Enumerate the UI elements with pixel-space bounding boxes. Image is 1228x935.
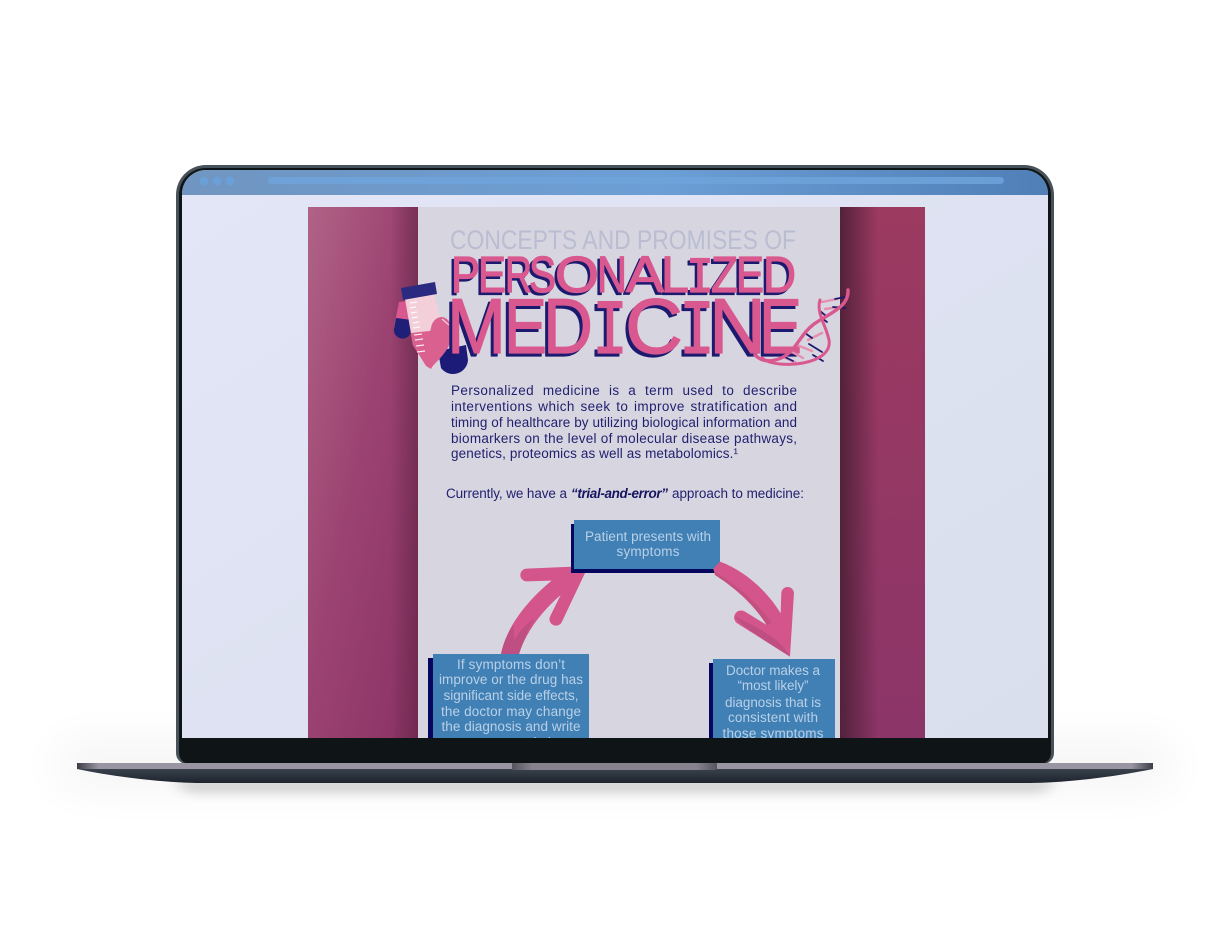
flow box: patient presents with symptoms: Patient presents with (585, 529, 711, 544)
icon: pills, test tube and heart (394, 282, 468, 374)
personalized pink layer: D (763, 246, 796, 303)
personalized shadow layer (452, 258, 789, 296)
personalized pink layer: N (597, 246, 627, 303)
flow box: doctor makes a most likely diagnosis (709, 659, 835, 738)
personalized shadow layer: I (684, 254, 712, 310)
flow box: patient presents with symptoms: symptoms (616, 544, 680, 559)
medicine shadow layer: I (676, 292, 712, 380)
personalized shadow layer: A (624, 248, 662, 306)
icon: heart (430, 317, 450, 367)
browser screen (182, 170, 1048, 750)
flow box: if symptoms don't improve: the diagnosis and write (442, 719, 580, 734)
intro paragraph (451, 383, 797, 461)
medicine shadow layer: E (756, 285, 799, 373)
medicine shadow layer (449, 302, 797, 358)
medicine shadow layer: N (706, 285, 763, 373)
personalized shadow layer: P (448, 248, 478, 306)
base body (77, 763, 1153, 783)
flow box: doctor makes a most likely diagnosis: Doctor makes a (726, 663, 820, 678)
laptop mockup scene (77, 165, 1153, 798)
intro paragraph: interventions which seek to improve stratification and (451, 399, 797, 414)
personalized shadow layer: R (502, 248, 530, 306)
medicine shadow layer: D (540, 285, 590, 373)
laptop lid bezel (176, 165, 1054, 764)
personalized shadow layer: E (476, 248, 504, 306)
medicine pink layer: C (625, 282, 683, 370)
medicine pink layer: E (759, 282, 802, 370)
trial-and-error statement: Currently, we have a (446, 486, 567, 501)
personalized pink layer (454, 256, 794, 294)
medicine shadow layer: E (501, 285, 544, 373)
central infographic column (418, 207, 840, 738)
title: concepts and promises of: CONCEPTS AND PROMISES OF (450, 225, 796, 255)
personalized shadow layer: L (658, 248, 686, 306)
arrow: box to patient (501, 566, 588, 654)
left maroon panel (308, 207, 418, 738)
personalized shadow layer: D (760, 248, 794, 306)
flow box: if symptoms don't improve: significant side effects, (444, 688, 578, 703)
medicine shadow layer: I (589, 292, 625, 380)
base notch (512, 763, 717, 770)
flow box: doctor makes a most likely diagnosis: diagnosis that is (725, 695, 821, 710)
personalized pink layer: E (478, 246, 506, 303)
intro paragraph: biomarkers on the level of molecular disease pathways, (451, 431, 797, 446)
personalized shadow layer: S (526, 248, 554, 306)
trial-and-error statement: approach to medicine: (672, 486, 804, 501)
flow box: if symptoms don't improve (428, 654, 589, 738)
medicine pink layer: M (447, 282, 506, 370)
medicine pink layer: N (709, 282, 766, 370)
personalized pink layer: R (505, 246, 532, 303)
screen background (182, 170, 1048, 738)
personalized shadow layer: Z (708, 248, 736, 306)
flow box: if symptoms don't improve: improve or the drug has (439, 672, 583, 687)
personalized shadow layer: N (594, 248, 624, 306)
medicine pink layer: I (679, 289, 715, 377)
medicine pink layer: D (543, 282, 593, 370)
intro paragraph: genetics, proteomics as well as metabolomics.¹ (451, 446, 738, 461)
flow box: doctor makes a most likely diagnosis: consistent with (728, 710, 818, 725)
personalized pink layer: A (626, 246, 664, 303)
title: personalized (452, 256, 794, 296)
flow box: patient presents with symptoms (571, 520, 720, 573)
medicine shadow layer: M (444, 285, 503, 373)
laptop base (77, 763, 1153, 783)
icon: test tube (401, 282, 440, 369)
personalized shadow layer: E (734, 248, 762, 306)
personalized pink layer: P (451, 246, 480, 303)
intro paragraph: timing of healthcare by utilizing biological information and (451, 415, 797, 430)
icon: right capsule (438, 345, 468, 374)
medicine pink layer (452, 298, 800, 355)
base top highlight strip (77, 763, 1153, 769)
medicine pink layer: E (504, 282, 547, 370)
icon: dna helix (755, 290, 848, 364)
flow box: if symptoms don't improve: If symptoms don’t (457, 657, 565, 672)
personalized shadow layer: O (552, 248, 596, 306)
trial-and-error statement: “trial-and-error” (571, 486, 668, 501)
icon: left capsule (394, 301, 411, 338)
right maroon panel (840, 207, 925, 738)
arrow: patient to doctor (713, 562, 794, 657)
personalized pink layer: L (661, 246, 689, 303)
medicine shadow layer: C (622, 285, 680, 373)
personalized pink layer: E (736, 246, 764, 303)
personalized pink layer: S (529, 246, 556, 303)
intro paragraph: Personalized medicine is a term used to describe (451, 383, 797, 398)
personalized pink layer: Z (711, 246, 738, 303)
title: medicine (449, 298, 800, 358)
personalized pink layer: I (686, 251, 714, 308)
trial-and-error statement (446, 488, 803, 501)
flow box: if symptoms don't improve: the doctor may change (441, 704, 581, 719)
personalized pink layer: O (555, 246, 599, 303)
flow box: doctor makes a most likely diagnosis: those symptoms (722, 726, 824, 741)
browser title bar (182, 170, 1048, 195)
laptop shadow (60, 745, 1170, 791)
flow box: doctor makes a most likely diagnosis: “most likely” (738, 678, 808, 693)
medicine pink layer: I (592, 289, 628, 377)
flow box: if symptoms don't improve: a new prescription (456, 735, 566, 750)
